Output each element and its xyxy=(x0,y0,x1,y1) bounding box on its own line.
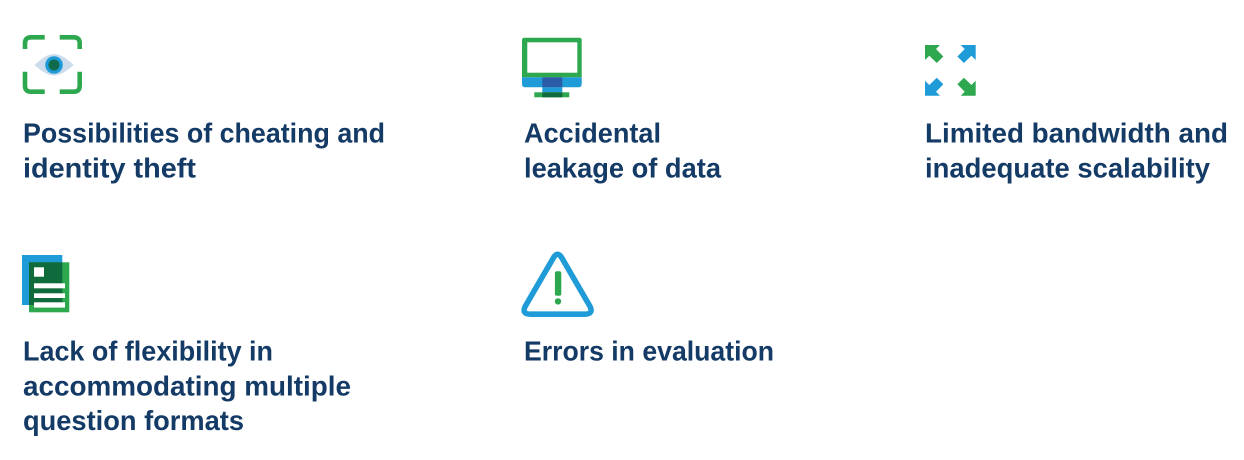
text: limited bandwidth and scalability xyxy=(925,118,1228,184)
text: accidental leakage of data: Accidental xyxy=(524,118,661,148)
text: accidental leakage of data xyxy=(524,118,722,184)
text: limited bandwidth and scalability: Limited bandwidth and xyxy=(925,118,1228,148)
icon: warning triangle xyxy=(524,254,591,314)
text: lack of flexibility: question formats xyxy=(23,405,244,436)
text: cheating and identity theft: identity theft xyxy=(23,152,196,184)
icon: overlapping documents xyxy=(22,255,69,312)
icon: computer monitor xyxy=(522,38,582,97)
icon: eye in green viewfinder xyxy=(25,37,80,92)
text: accidental leakage of data: leakage of data xyxy=(524,152,722,184)
text: errors in evaluation: Errors in evaluation xyxy=(524,336,774,366)
icon: four expanding arrows xyxy=(925,45,976,96)
text: cheating and identity theft xyxy=(23,118,385,184)
text: cheating and identity theft: Possibilities of cheating and xyxy=(23,118,385,148)
text: limited bandwidth and scalability: inadequate scalability xyxy=(925,152,1211,184)
text: lack of flexibility: accommodating multiple xyxy=(23,370,351,402)
text: lack of flexibility: Lack of flexibility in xyxy=(23,336,273,366)
text: lack of flexibility xyxy=(23,336,351,436)
